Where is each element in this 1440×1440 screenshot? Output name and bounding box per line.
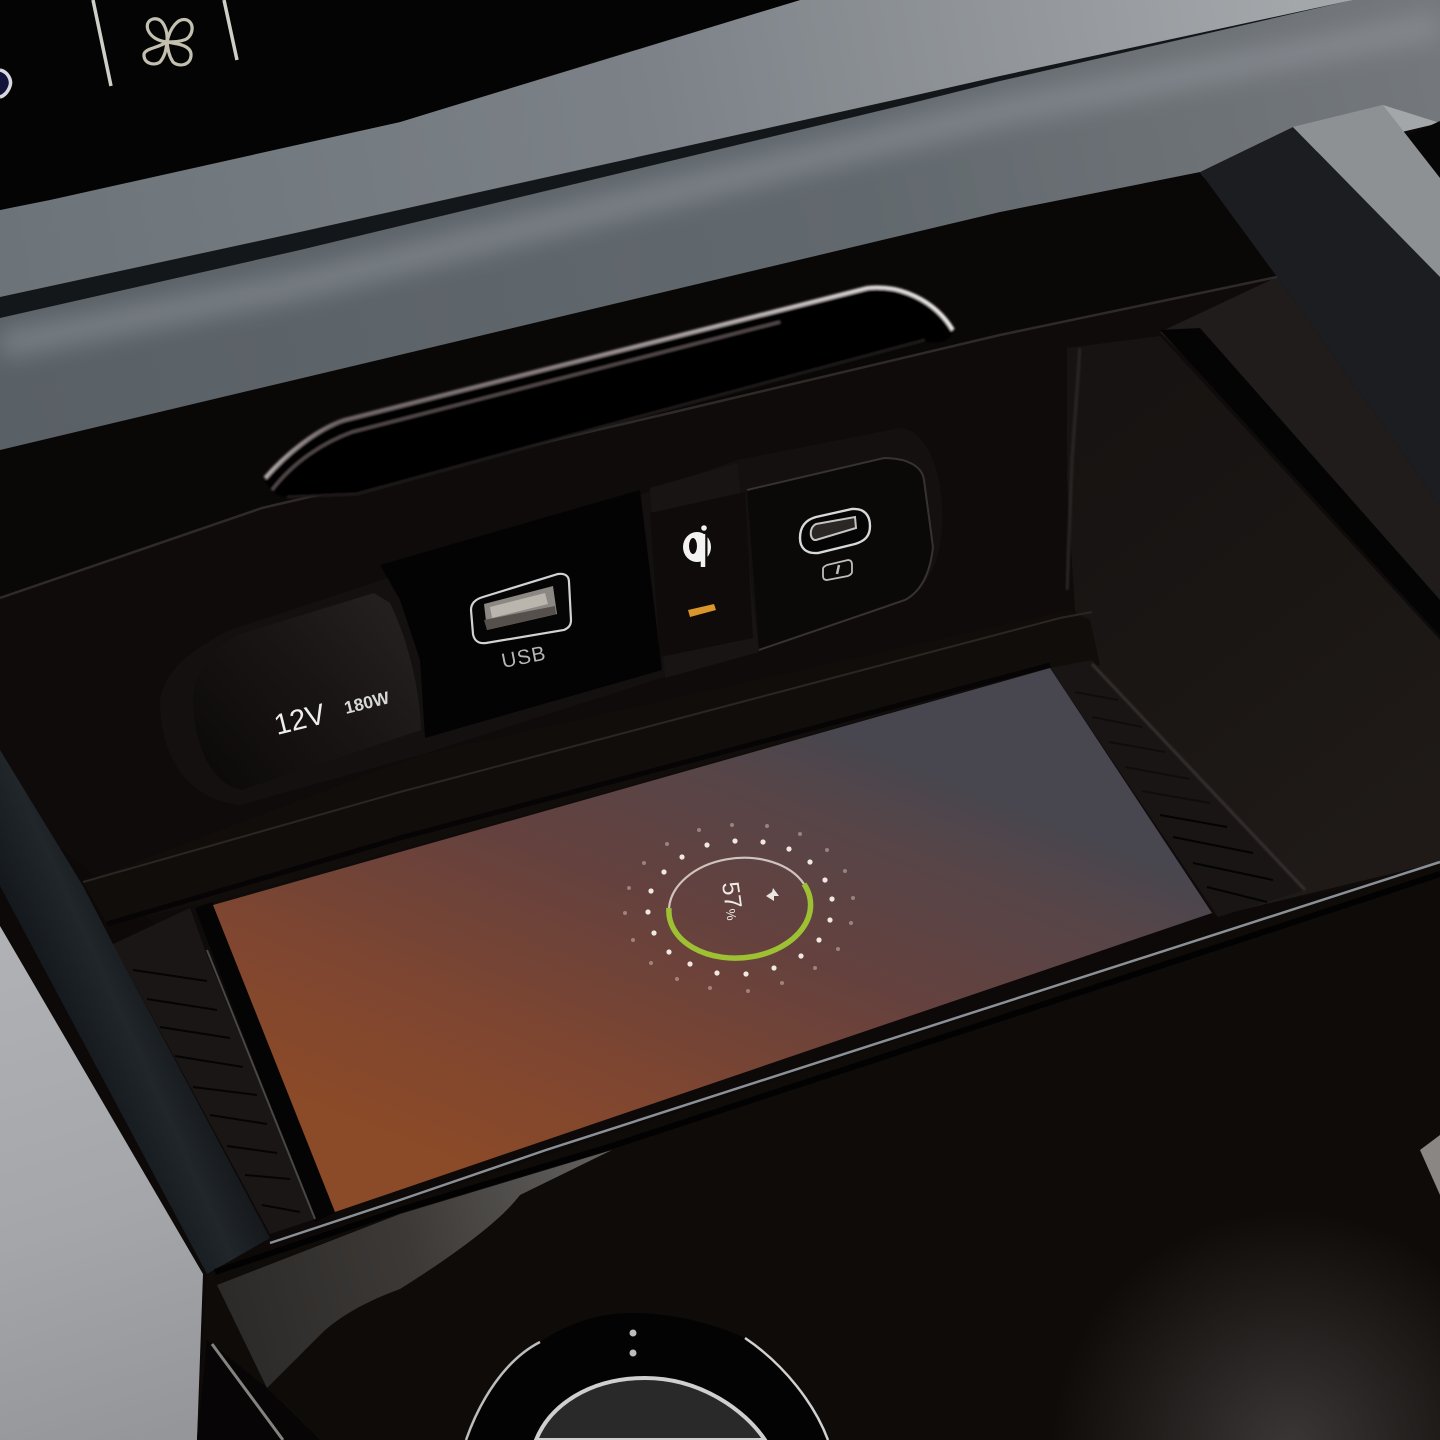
lid bevel reflection — [217, 1150, 612, 1388]
panel: upper gloss ledge — [0, 172, 1277, 598]
charging dots outer — [623, 823, 855, 993]
panel: upper dashboard trim — [0, 0, 1440, 460]
battery percentage: 57% — [716, 880, 748, 922]
panel: rubber mat left — [113, 908, 315, 1234]
panel: phone on charging pad — [195, 668, 1212, 1222]
panel: tray right wall — [1067, 336, 1440, 915]
handle: chrome door pull — [265, 287, 953, 497]
icon: qi logo — [683, 525, 711, 567]
icon: charging bolt — [766, 888, 779, 901]
lid glow lower right — [1050, 1210, 1440, 1440]
dark crease — [0, 0, 1353, 318]
panel: rubber mat right — [1050, 660, 1305, 917]
door edge highlight — [0, 277, 1277, 598]
screen divider left — [93, 0, 111, 86]
panel: wall strip and groove — [1160, 277, 1440, 636]
panel: port cluster surround — [160, 428, 942, 805]
wall crease — [1067, 348, 1080, 590]
panel: front gloss lid — [197, 862, 1440, 1440]
icon: rotary dial — [466, 1313, 828, 1440]
screen divider right — [224, 0, 237, 60]
panel: 12V socket cap — [193, 593, 421, 790]
charging dots inner — [645, 838, 835, 977]
charge ring — [669, 858, 811, 958]
panel: USB-C cap — [747, 458, 933, 650]
panel: right side pillar — [1200, 105, 1440, 510]
label: 12V: 12V — [271, 698, 329, 742]
USB-C socket — [800, 509, 870, 553]
touchscreen — [0, 0, 800, 210]
panel: left side trim dark strip — [0, 750, 270, 1274]
lid silver edge — [212, 1344, 283, 1440]
USB socket — [471, 574, 571, 643]
lid reflection right — [1420, 1135, 1440, 1195]
icon: fan — [144, 19, 192, 65]
label: 180W: 180W — [342, 687, 392, 718]
icon: battery — [823, 560, 852, 580]
lid dark lower corner — [197, 1340, 320, 1440]
panel: left seat-side light trim — [0, 926, 203, 1440]
indicator: amber dash — [688, 604, 716, 617]
charging display — [623, 823, 855, 993]
panel: back wall of tray — [0, 277, 1440, 960]
label: USB: USB — [500, 642, 548, 673]
panel: USB port — [380, 490, 662, 738]
leather highlight — [0, 25, 1440, 345]
panel: qi module — [650, 463, 759, 678]
leather dashboard band — [0, 0, 1440, 450]
lid highlight edge — [270, 862, 1440, 1243]
port cluster lower ledge — [83, 610, 1100, 924]
icon: partial seat symbol — [0, 70, 11, 97]
